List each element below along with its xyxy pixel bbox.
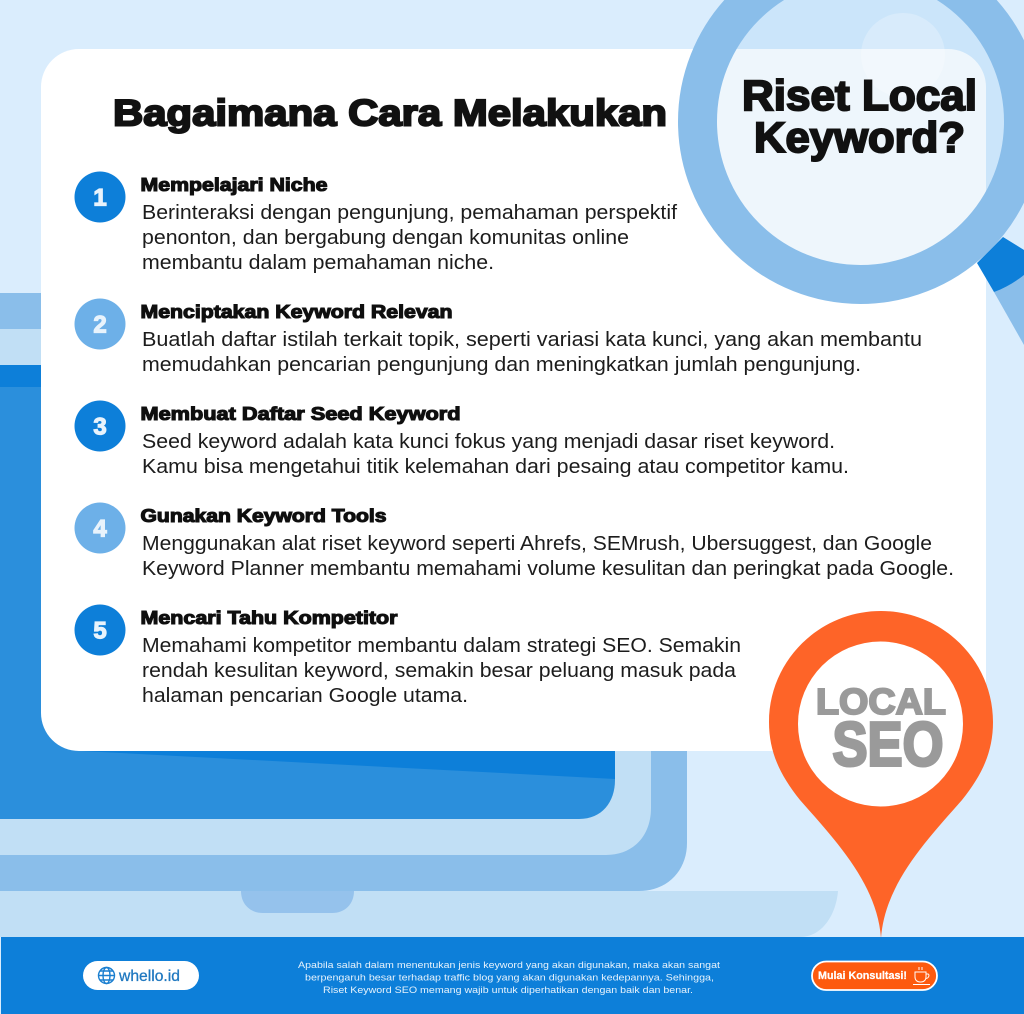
description 1: membantu dalam pemahaman niche. bbox=[142, 252, 494, 274]
title: text in the lens: Riset Local bbox=[742, 72, 977, 120]
footer note: berpengaruh besar terhadap traffic blog yang akan digunakan kedepannya. Sehingga, bbox=[305, 972, 714, 984]
number badge 1: 1 bbox=[93, 184, 107, 212]
step 4 bbox=[74, 502, 954, 580]
magnifying glass bbox=[698, 0, 1024, 345]
description 3: Seed keyword adalah kata kunci fokus yang menjadi dasar riset keyword. bbox=[142, 431, 835, 453]
number badge 5: 5 bbox=[93, 618, 107, 644]
description 3: Kamu bisa mengetahui titik kelemahan dari pesaing atau competitor kamu. bbox=[142, 456, 849, 478]
step 3 bbox=[74, 400, 849, 478]
icon: coffee cup bbox=[913, 967, 930, 984]
heading 5: Mencari Tahu Kompetitor bbox=[140, 608, 398, 628]
description 5 bbox=[142, 635, 741, 707]
description 4 bbox=[142, 533, 954, 580]
number badge 1 bbox=[74, 172, 126, 222]
description 3 bbox=[142, 431, 849, 478]
heading 3: Membuat Daftar Seed Keyword bbox=[140, 404, 460, 424]
heading 2: Menciptakan Keyword Relevan bbox=[140, 302, 452, 322]
number badge 3: 3 bbox=[93, 414, 107, 440]
lens highlight bbox=[861, 13, 945, 97]
number badge 2: 2 bbox=[93, 312, 107, 338]
description 5: rendah kesulitan keyword, semakin besar peluang masuk pada bbox=[142, 660, 737, 682]
icon: globe bbox=[98, 968, 114, 984]
title: left part: Bagaimana Cara Melakukan bbox=[113, 92, 667, 134]
icon: magnifier handle bbox=[977, 237, 1024, 345]
number badge 2 bbox=[74, 298, 126, 350]
button: Mulai Konsultasi bbox=[812, 962, 937, 990]
icon: location pin bbox=[769, 611, 993, 938]
description 2 bbox=[142, 329, 922, 376]
pin label bbox=[816, 681, 946, 780]
pin label: LOCAL bbox=[816, 681, 946, 722]
magnifier lens bbox=[716, 0, 1004, 266]
number badge 4 bbox=[74, 502, 126, 554]
heading 1: Mempelajari Niche bbox=[140, 175, 328, 195]
description 1: penonton, dan bergabung dengan komunitas online bbox=[142, 227, 629, 249]
description 1: Berinteraksi dengan pengunjung, pemahaman perspektif bbox=[142, 202, 677, 224]
button: Mulai Konsultasi: Mulai Konsultasi! bbox=[818, 970, 907, 982]
description 2: Buatlah daftar istilah terkait topik, seperti variasi kata kunci, yang akan membantu bbox=[142, 329, 922, 351]
heading 4: Gunakan Keyword Tools bbox=[140, 506, 386, 526]
description 4: Keyword Planner membantu memahami volume kesulitan dan peringkat pada Google. bbox=[142, 558, 954, 580]
panel: white card bbox=[41, 49, 986, 751]
step 5 bbox=[74, 604, 741, 707]
footer note: Apabila salah dalam menentukan jenis keyword yang akan digunakan, maka akan sangat bbox=[298, 960, 720, 971]
logo: whello.id bbox=[83, 961, 199, 990]
step 2 bbox=[74, 298, 922, 376]
footer bar bbox=[1, 937, 1024, 1014]
step 1 bbox=[74, 172, 677, 274]
title: text in the lens bbox=[742, 72, 977, 162]
description 1 bbox=[142, 202, 677, 274]
footer note bbox=[298, 960, 720, 996]
description 5: Memahami kompetitor membantu dalam strategi SEO. Semakin bbox=[142, 635, 741, 657]
magnifier ring bbox=[698, 0, 1024, 284]
footer note: Riset Keyword SEO memang wajib untuk diperhatikan dengan baik dan benar. bbox=[323, 985, 693, 996]
description 4: Menggunakan alat riset keyword seperti Ahrefs, SEMrush, Ubersuggest, dan Google bbox=[142, 533, 932, 555]
number badge 3 bbox=[74, 400, 126, 452]
number badge 5 bbox=[74, 604, 126, 656]
pin label: SEO bbox=[832, 710, 944, 780]
laptop illustration bbox=[0, 293, 838, 937]
logo: whello.id: whello.id bbox=[118, 968, 180, 985]
description 2: memudahkan pencarian pengunjung dan meningkatkan jumlah pengunjung. bbox=[142, 354, 861, 376]
title: text in the lens: Keyword? bbox=[754, 114, 965, 162]
description 5: halaman pencarian Google utama. bbox=[142, 685, 468, 707]
number badge 4: 4 bbox=[93, 516, 107, 542]
